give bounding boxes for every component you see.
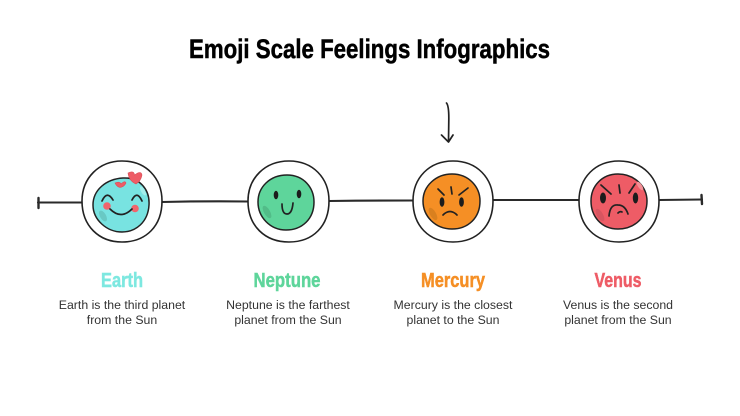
item: Neptune [226, 270, 350, 327]
heading: Venus: Venus [594, 270, 642, 292]
description: Venus: Venus is the second [563, 298, 673, 312]
description: Mercury: planet to the Sun [407, 313, 500, 327]
heading: Earth: Earth [101, 270, 143, 292]
description: Earth: Earth is the third planet [59, 298, 186, 312]
description: Earth: from the Sun [87, 313, 157, 327]
description: Earth [59, 298, 186, 327]
arrow pointing to Mercury [442, 103, 453, 142]
emoji: Venus, angry [579, 161, 659, 242]
emoji: Mercury, annoyed [413, 161, 493, 242]
emoji: Neptune, smiling [248, 161, 329, 242]
emoji: Earth, happy in love [82, 161, 162, 242]
scale line [38, 195, 702, 208]
description: Mercury [394, 298, 513, 327]
description: Neptune: planet from the Sun [234, 313, 342, 327]
description: Venus: planet from the Sun [564, 313, 672, 327]
item: Mercury [394, 270, 513, 327]
description: Mercury: Mercury is the closest [394, 298, 513, 312]
heading: Neptune: Neptune [254, 270, 320, 292]
description: Neptune: Neptune is the farthest [226, 298, 350, 312]
heading: Mercury: Mercury [421, 270, 486, 292]
item: Earth [59, 270, 186, 327]
description: Venus [563, 298, 673, 327]
title: Emoji Scale Feelings Infographics [189, 34, 550, 64]
description: Neptune [226, 298, 350, 327]
item: Venus [563, 270, 673, 327]
